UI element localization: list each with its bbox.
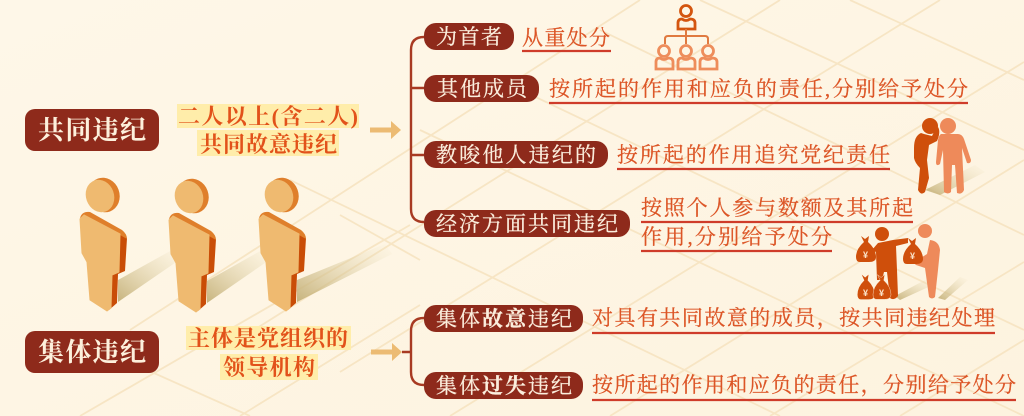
pill: 其他成员 <box>424 75 539 102</box>
bracket: upper <box>411 37 424 222</box>
badge: 共同违纪: 共同违纪 <box>38 116 146 145</box>
bracket: lower <box>402 318 424 385</box>
text: 集体过失处分: 按所起的作用和应负的责任，分别给予处分 <box>592 373 1016 398</box>
text: 从重处分: 从重处分 <box>522 26 610 50</box>
person 1 <box>80 173 127 311</box>
text: 经济处分: 按照个人参与数额及其所起 <box>641 196 913 220</box>
text: 其他成员处分: 按所起的作用和应负的责任,分别给予处分 <box>549 77 968 101</box>
icon: organization <box>656 6 717 69</box>
person 2 <box>169 174 216 312</box>
text: 经济处分: 作用,分别给予处分 <box>641 225 832 249</box>
text: 教唆处分: 按所起的作用追究党纪责任 <box>617 143 890 167</box>
pill: 其他成员: 其他成员 <box>437 77 529 101</box>
text block: 二人以上共同故意违纪: 共同故意违纪 <box>200 132 337 157</box>
arrow: lower <box>371 343 402 361</box>
pill: 教唆他人违纪的: 教唆他人违纪的 <box>436 143 596 167</box>
arrow: upper <box>370 121 401 139</box>
pill: 为首者: 为首者 <box>436 25 502 49</box>
pill: 经济方面共同违纪: 经济方面共同违纪 <box>436 212 618 236</box>
pill: 为首者 <box>424 23 514 50</box>
badge: 集体违纪: 集体违纪 <box>38 338 146 367</box>
pill: 集体故意违纪: 集体故意违纪 <box>436 307 572 331</box>
badge: 共同违纪 <box>25 109 159 151</box>
person 3 <box>259 173 306 311</box>
text block: 主体是党组织的领导机构 <box>186 326 351 380</box>
text: 经济处分 <box>641 196 913 251</box>
figures: three people <box>80 173 392 312</box>
icon: two people whispering <box>914 118 985 195</box>
icon: money exchange <box>856 224 968 300</box>
icon: money exchange: ¥ <box>910 251 915 261</box>
icon: money exchange: ¥ <box>879 288 884 298</box>
text block: 二人以上共同故意违纪: 二人以上(含二人) <box>178 104 358 129</box>
shadows <box>118 244 392 303</box>
text: 集体故意处理: 对具有共同故意的成员，按共同违纪处理 <box>592 306 995 331</box>
icon: money exchange: ¥ <box>863 250 868 260</box>
text block: 二人以上共同故意违纪 <box>177 104 359 157</box>
text block: 主体是党组织的领导机构: 主体是党组织的 <box>188 326 348 351</box>
icon: money exchange: ¥ <box>863 288 868 298</box>
badge: 集体违纪 <box>25 331 159 373</box>
text block: 主体是党组织的领导机构: 领导机构 <box>223 355 315 380</box>
pill: 集体过失违纪: 集体过失违纪 <box>436 374 572 398</box>
